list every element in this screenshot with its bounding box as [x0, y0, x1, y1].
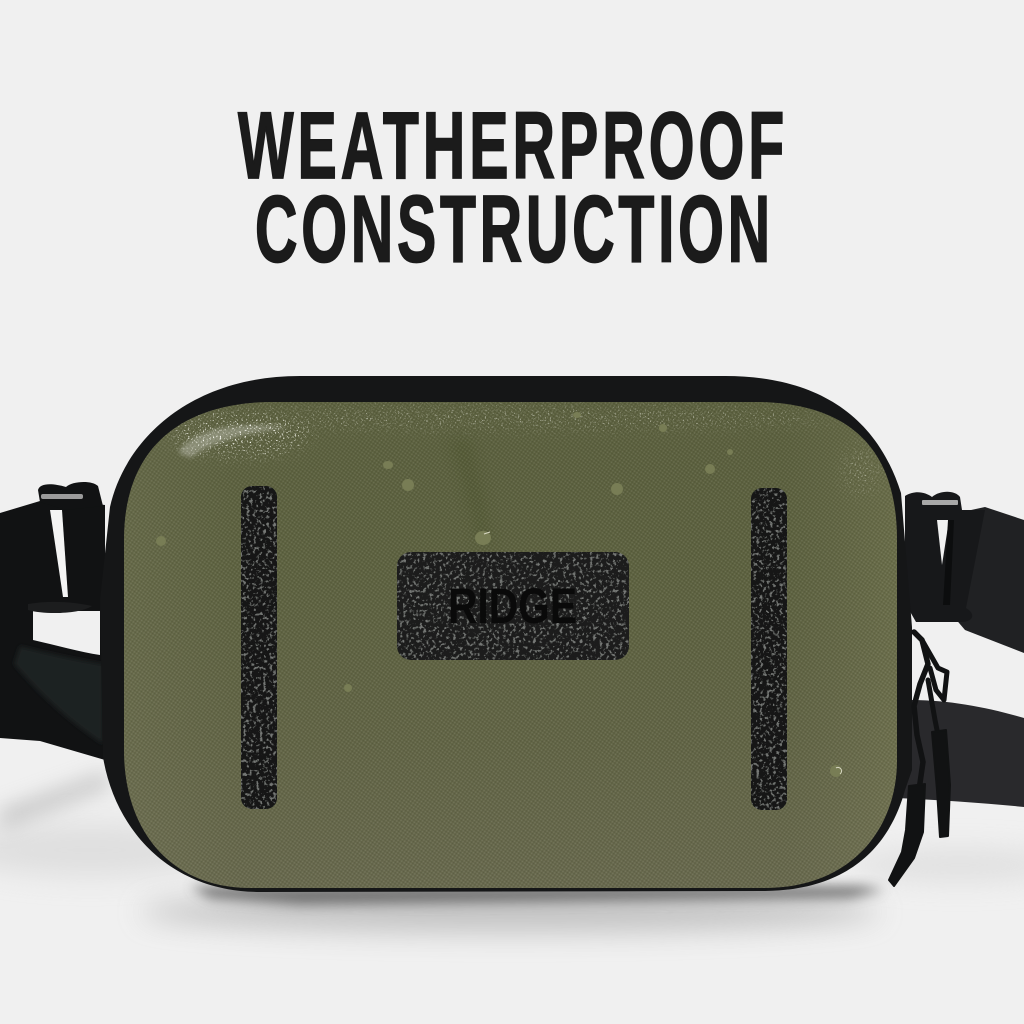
right buckle: [905, 492, 985, 622]
right strap: [897, 507, 1024, 807]
surface water speckle: [162, 402, 886, 502]
title: WEATHERPROOF: [238, 92, 784, 199]
water droplets: [156, 412, 842, 777]
bag body: black shell: [100, 376, 912, 892]
title: [238, 92, 784, 282]
right vertical slot: [751, 488, 787, 810]
zipper pulls: [889, 632, 950, 886]
left vertical slot: [241, 486, 277, 809]
title: CONSTRUCTION: [255, 175, 770, 282]
logo patch: [397, 552, 629, 660]
bag front panel: olive: [120, 400, 900, 890]
floor shadows: [0, 772, 1024, 932]
logo patch: RIDGE: [448, 578, 577, 634]
left strap: [0, 498, 105, 760]
left buckle: [28, 482, 103, 613]
